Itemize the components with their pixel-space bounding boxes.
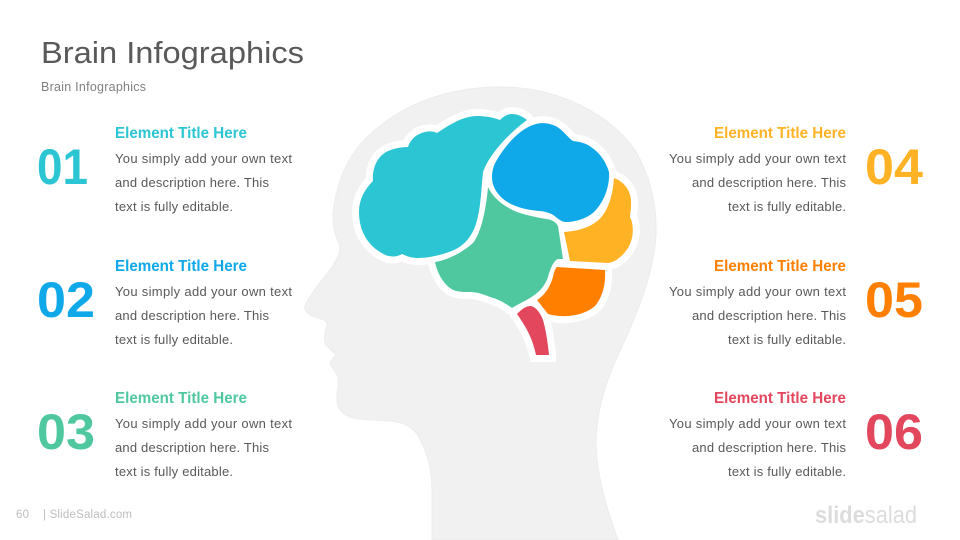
- brain region: parietal lobe: [492, 123, 609, 222]
- description 02: and description here. This: [115, 308, 270, 323]
- description 01: You simply add your own text: [115, 151, 292, 166]
- number 05: 05: [865, 272, 923, 328]
- heading 03: Element Title Here: [115, 390, 247, 407]
- number 02: 02: [37, 272, 95, 328]
- description 06: and description here. This: [692, 440, 846, 455]
- description 04: and description here. This: [692, 175, 846, 190]
- brain region: occipital lobe: [564, 178, 633, 263]
- description 01: text is fully editable.: [115, 199, 233, 214]
- description 05: and description here. This: [692, 308, 846, 323]
- logo wordmark: slidesalad: [815, 502, 917, 529]
- heading 01: Element Title Here: [115, 125, 247, 142]
- brain diagram: [359, 114, 633, 362]
- description 04: text is fully editable.: [728, 199, 846, 214]
- brain region: temporal lobe: [435, 187, 563, 308]
- brain white outline: [359, 114, 633, 362]
- element 02: [37, 258, 292, 347]
- element 05: [669, 258, 923, 347]
- description 03: [115, 416, 292, 479]
- brain region: cerebellum: [537, 267, 605, 316]
- element 03: [37, 390, 292, 479]
- page number: 60: [16, 509, 29, 521]
- description 03: and description here. This: [115, 440, 270, 455]
- element 06: [669, 390, 923, 479]
- description 06: text is fully editable.: [728, 464, 846, 479]
- description 05: text is fully editable.: [728, 332, 846, 347]
- brain region: brain stem: [517, 306, 549, 355]
- brain region: frontal lobe: [359, 114, 527, 258]
- description 03: You simply add your own text: [115, 416, 292, 431]
- description 02: You simply add your own text: [115, 284, 292, 299]
- heading 04: Element Title Here: [714, 125, 846, 142]
- description 02: [115, 284, 292, 347]
- description 05: You simply add your own text: [669, 284, 846, 299]
- heading 05: Element Title Here: [714, 258, 846, 275]
- description 06: [669, 416, 846, 479]
- number 01: 01: [37, 139, 88, 195]
- description 03: text is fully editable.: [115, 464, 233, 479]
- number 04: 04: [865, 139, 923, 195]
- footer source: | SlideSalad.com: [43, 509, 132, 521]
- head silhouette: [305, 87, 656, 540]
- description 01: [115, 151, 292, 214]
- title: Brain Infographics: [41, 35, 304, 70]
- description 04: [669, 151, 846, 214]
- number 03: 03: [37, 404, 95, 460]
- element 01: [37, 125, 292, 214]
- description 05: [669, 284, 846, 347]
- description 04: You simply add your own text: [669, 151, 846, 166]
- heading 06: Element Title Here: [714, 390, 846, 407]
- description 01: and description here. This: [115, 175, 270, 190]
- number 06: 06: [865, 404, 923, 460]
- description 06: You simply add your own text: [669, 416, 846, 431]
- description 02: text is fully editable.: [115, 332, 233, 347]
- subtitle: Brain Infographics: [41, 80, 146, 94]
- heading 02: Element Title Here: [115, 258, 247, 275]
- element 04: [669, 125, 923, 214]
